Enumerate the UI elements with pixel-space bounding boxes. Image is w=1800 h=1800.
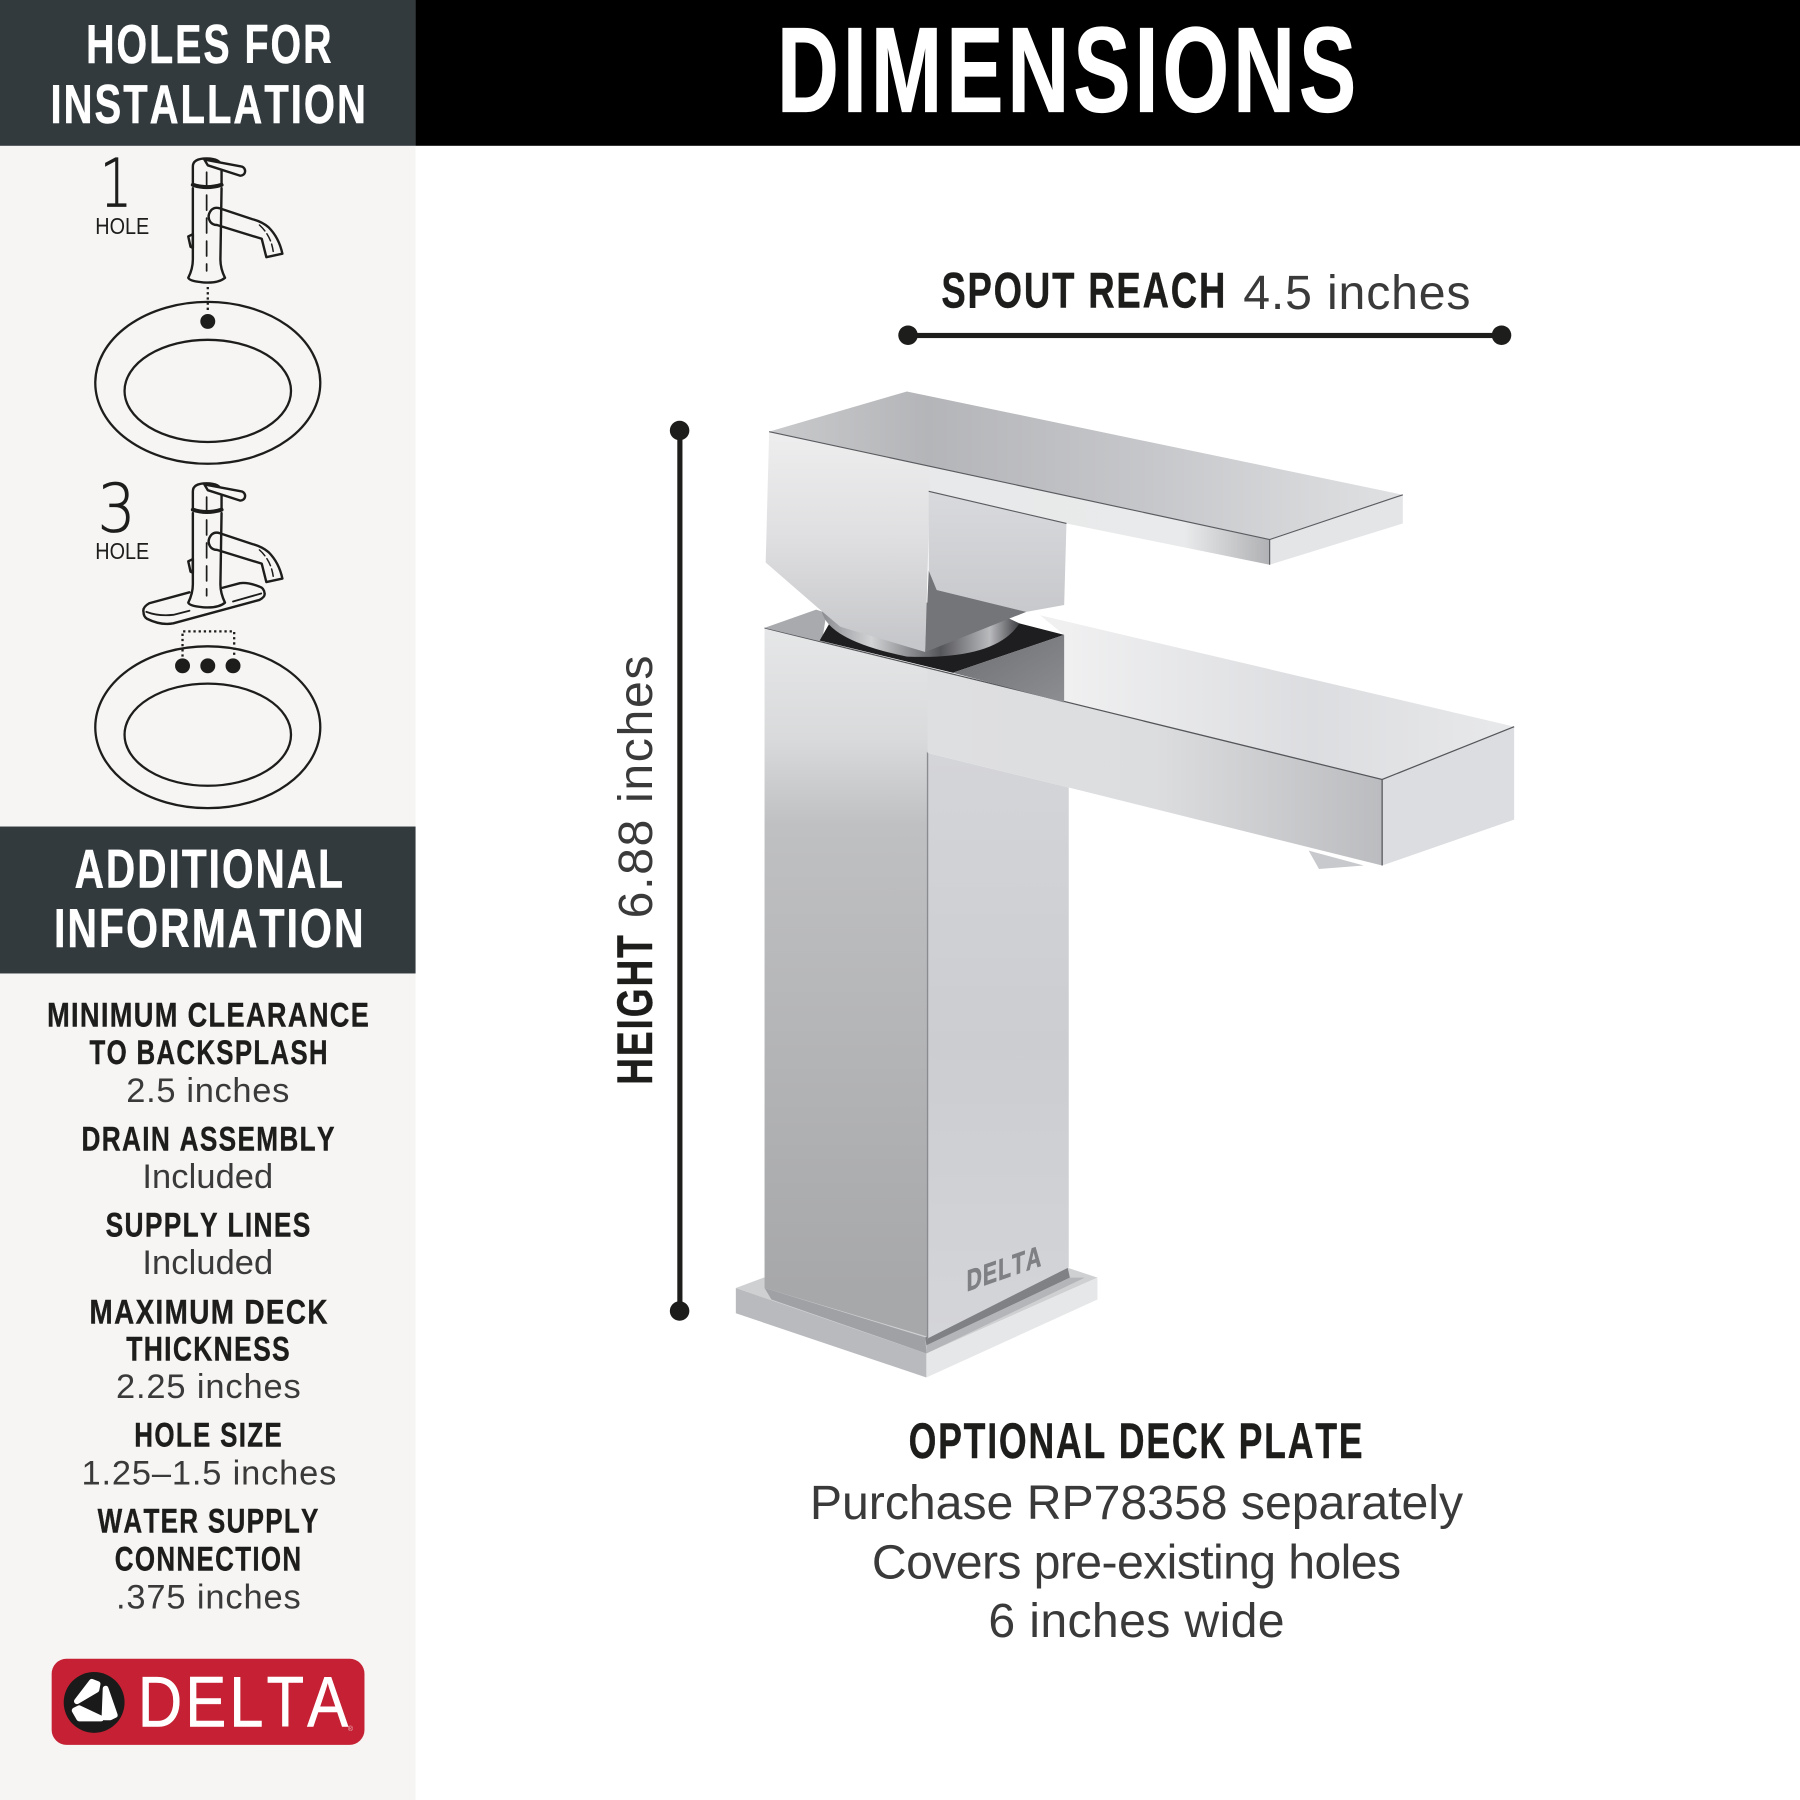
logo: Delta: ®: [348, 1725, 353, 1733]
base plate: [736, 1267, 1097, 1378]
label: 1 hole: [95, 145, 149, 239]
heading: holes for installation: HOLES FOR: [86, 13, 333, 75]
text block: water supply connection: [98, 1503, 320, 1616]
arrow: spout reach dimension line: [898, 325, 1511, 345]
text block: minimum clearance: [47, 996, 370, 1110]
text block: optional deck plate: Covers pre-existing holes: [872, 1535, 1401, 1589]
label: height: [606, 655, 663, 1085]
text block: minimum clearance: MINIMUM CLEARANCE: [47, 996, 370, 1034]
text block: drain assembly: Included: [142, 1158, 273, 1196]
text block: optional deck plate: [810, 1412, 1463, 1648]
text block: minimum clearance: 2.5 inches: [126, 1072, 289, 1110]
text block: optional deck plate: OPTIONAL DECK PLATE: [909, 1412, 1364, 1469]
logo: Delta: [52, 1659, 364, 1745]
icon: three-hole faucet with deck plate: [143, 483, 282, 624]
label: 3 hole: [95, 470, 149, 564]
label: 3 hole: HOLE: [95, 538, 149, 564]
label: 1 hole: HOLE: [95, 213, 149, 239]
text block: water supply connection: .375 inches: [116, 1578, 301, 1616]
text block: supply lines: [106, 1206, 312, 1282]
heading: additional information: ADDITIONAL: [75, 837, 345, 899]
text block: maximum deck thickness: THICKNESS: [126, 1330, 291, 1368]
text block: hole size: 1.25–1.5 inches: [82, 1454, 336, 1492]
text block: maximum deck thickness: MAXIMUM DECK: [90, 1294, 329, 1332]
icon: sink with one hole: [95, 287, 320, 464]
logo: Delta: DELTA: [138, 1664, 351, 1743]
text block: hole size: HOLE SIZE: [134, 1416, 283, 1454]
recess around the valve: [765, 603, 1064, 703]
heading: holes for installation: INSTALLATION: [51, 73, 368, 135]
text block: drain assembly: [82, 1120, 336, 1196]
heading: additional information: INFORMATION: [54, 897, 366, 959]
text block: maximum deck thickness: 2.25 inches: [116, 1368, 301, 1406]
title: dimensions: [416, 0, 1800, 146]
heading: additional information: [0, 827, 416, 973]
spout: [765, 615, 1514, 869]
label: height: 6.88 inches: [609, 655, 663, 918]
label: 3 hole: 3: [98, 470, 135, 548]
text block: supply lines: SUPPLY LINES: [106, 1206, 312, 1244]
text block: optional deck plate: 6 inches wide: [988, 1594, 1285, 1648]
icon: single-hole faucet: [188, 158, 282, 283]
text block: water supply connection: WATER SUPPLY: [98, 1503, 320, 1541]
faucet body: [765, 628, 1069, 1340]
text block: minimum clearance: TO BACKSPLASH: [90, 1034, 329, 1072]
panel: sidebar: [0, 0, 416, 1800]
label: 1 hole: 1: [100, 145, 132, 223]
icon: sink with three holes: [95, 631, 320, 808]
label: spout reach: 4.5 inches: [1243, 266, 1471, 320]
label: spout reach: SPOUT REACH: [941, 262, 1227, 319]
DELTA engraving: DELTA: [967, 1238, 1042, 1298]
chart: faucet product illustration: [736, 391, 1514, 1378]
text block: hole size: [82, 1416, 336, 1492]
text block: supply lines: Included: [142, 1244, 273, 1282]
title: dimensions: DIMENSIONS: [777, 2, 1360, 137]
heading: holes for installation: [0, 0, 416, 146]
label: height: HEIGHT: [606, 933, 663, 1085]
handle: [766, 391, 1403, 652]
text block: drain assembly: DRAIN ASSEMBLY: [82, 1120, 336, 1158]
text block: maximum deck thickness: [90, 1294, 329, 1406]
arrow: height dimension line: [670, 421, 689, 1321]
text block: water supply connection: CONNECTION: [115, 1540, 302, 1578]
text block: optional deck plate: Purchase RP78358 separately: [810, 1476, 1463, 1530]
